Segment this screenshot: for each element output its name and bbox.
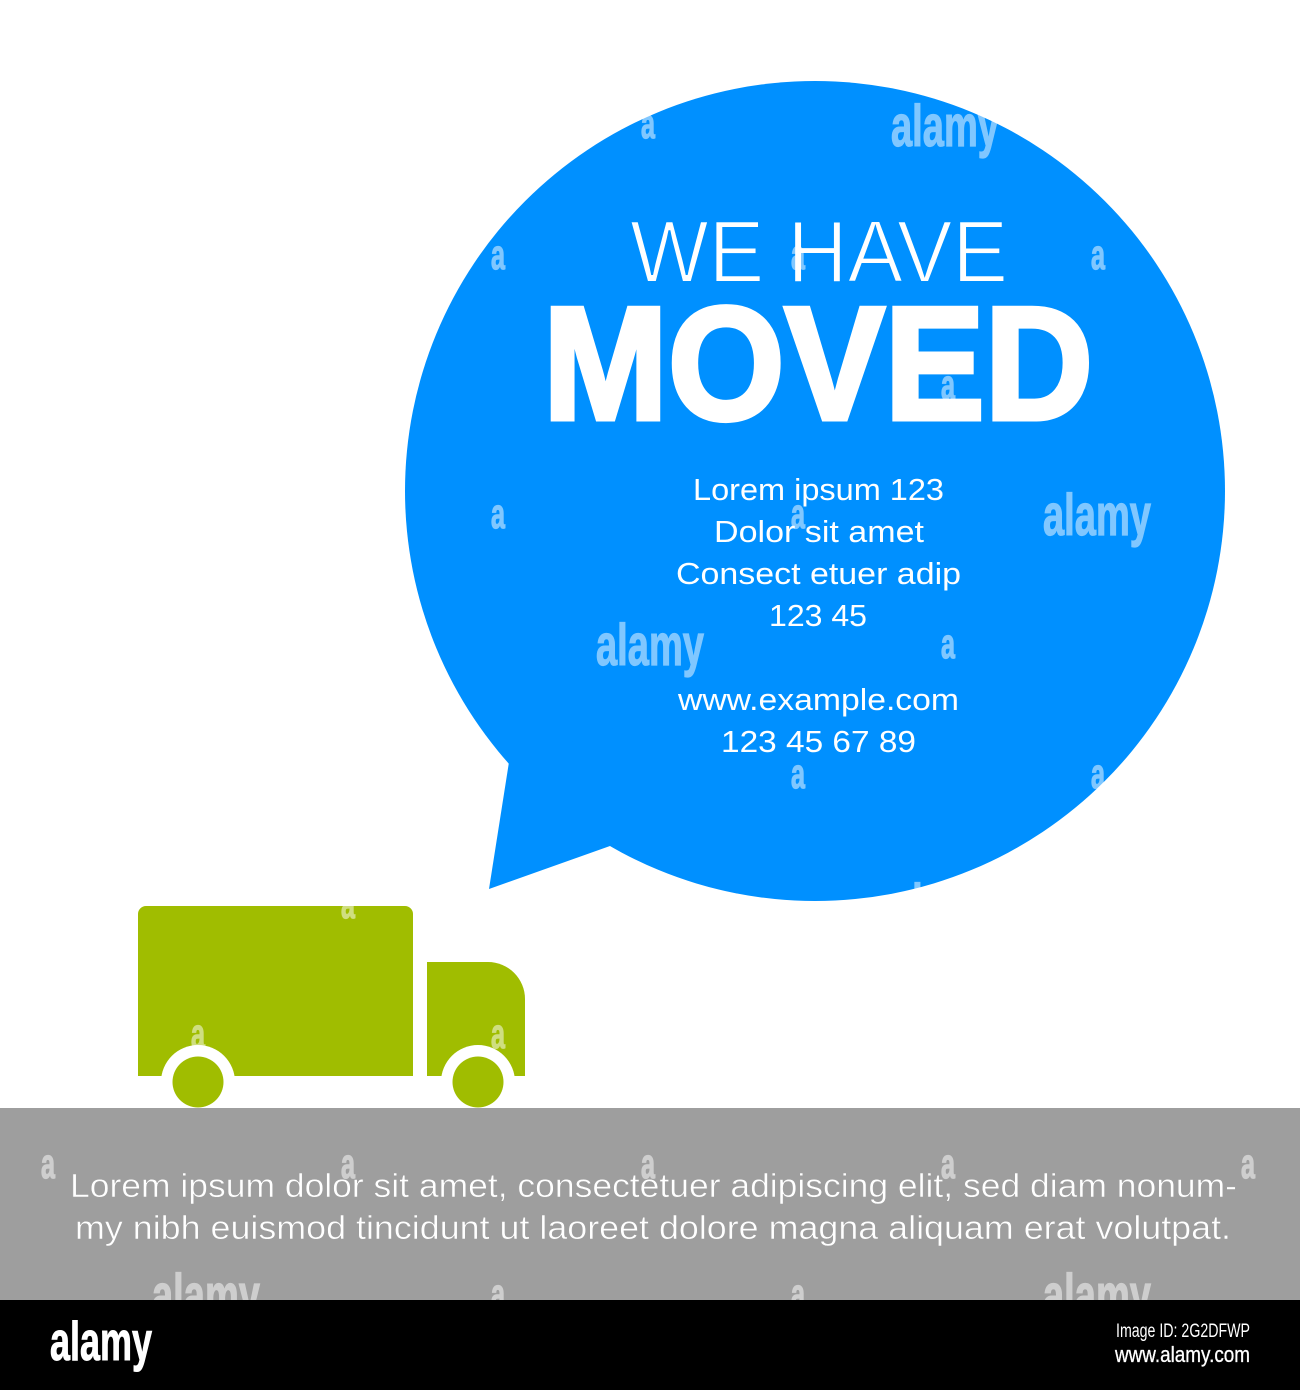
watermarks: a — [41, 1140, 55, 1187]
watermarks: a — [1091, 750, 1105, 797]
text block: address: Consect etuer adip — [676, 556, 961, 591]
watermarks: a — [491, 1270, 505, 1317]
logo: alamy: alamy — [50, 1310, 152, 1372]
panel: speech bubble — [405, 81, 1225, 901]
text block: contact: 123 45 67 89 — [721, 724, 916, 759]
panel: black credit bar — [0, 1300, 1300, 1390]
watermarks: alamy — [891, 94, 999, 159]
watermarks: a — [941, 620, 955, 667]
watermarks: alamy — [1043, 1263, 1151, 1328]
watermarks: a — [941, 1140, 955, 1187]
watermarks: alamy — [891, 873, 999, 938]
text block: address: Lorem ipsum 123 — [693, 472, 944, 507]
watermarks: a — [341, 880, 355, 927]
watermarks: alamy — [596, 613, 704, 678]
heading: moved: MOVED — [543, 274, 1093, 454]
watermarks: a — [791, 750, 805, 797]
text block: contact: www.example.com — [677, 682, 959, 717]
watermarks: a — [491, 231, 505, 278]
icon: green delivery truck — [130, 906, 530, 1119]
text block: address: 123 45 — [769, 598, 867, 633]
watermarks: a — [491, 1010, 505, 1057]
text: image id: Image ID: 2G2DFWP — [1116, 1321, 1250, 1342]
watermarks: a — [791, 1270, 805, 1317]
panel: grey ground band — [0, 1108, 1300, 1300]
watermarks: a — [791, 231, 805, 278]
watermarks: alamy — [1043, 483, 1151, 548]
text block: footer description: my nibh euismod tincidunt ut laoreet dolore magna aliquam erat volutpat. — [75, 1209, 1231, 1246]
text block: contact — [677, 682, 959, 759]
watermarks: a — [941, 361, 955, 408]
text block: footer description: Lorem ipsum dolor sit amet, consectetuer adipiscing elit, sed diam nonum- — [70, 1167, 1237, 1204]
watermarks: alamy — [152, 1263, 260, 1328]
watermarks: a — [641, 100, 655, 147]
heading: we have: WE HAVE — [630, 202, 1008, 301]
watermarks: a — [1241, 1140, 1255, 1187]
text block: address: Dolor sit amet — [714, 514, 924, 549]
watermarks: a — [1091, 231, 1105, 278]
watermarks: a — [491, 490, 505, 537]
watermarks: a — [341, 1140, 355, 1187]
text block: footer description — [70, 1167, 1237, 1246]
watermarks: a — [641, 1140, 655, 1187]
watermarks: a — [191, 1010, 205, 1057]
text: website: www.alamy.com — [1114, 1342, 1250, 1367]
text block: address — [676, 472, 961, 633]
watermarks: a — [791, 490, 805, 537]
